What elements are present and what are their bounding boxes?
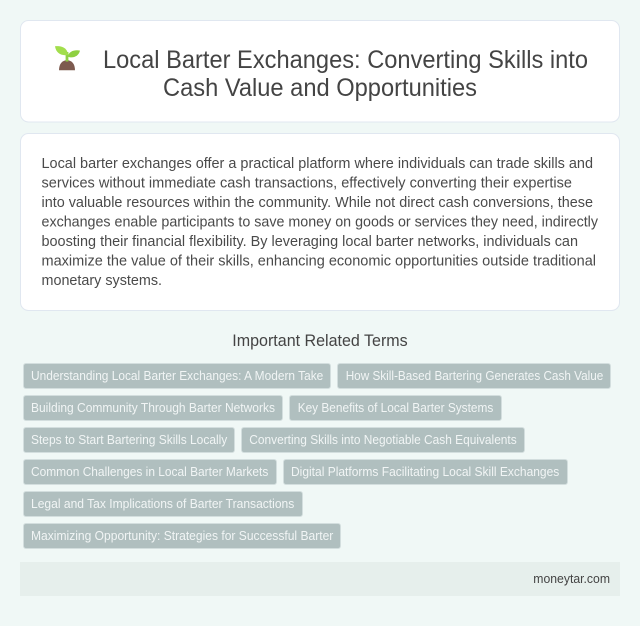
tag	[242, 428, 524, 452]
tag: Key Benefits of Local Barter Systems	[298, 401, 493, 415]
tag	[24, 396, 282, 420]
icon: seedling	[55, 46, 80, 70]
tag	[24, 428, 234, 452]
tag	[24, 460, 276, 484]
panel: title card	[20, 20, 620, 122]
title: Cash Value and Opportunities	[163, 75, 477, 102]
tag: How Skill-Based Bartering Generates Cash Value	[346, 369, 603, 383]
tag: Maximizing Opportunity: Strategies for Successful Barter	[31, 529, 333, 543]
tag	[338, 364, 610, 388]
text block: description: Local barter exchanges offer a practical platform where individuals can trade skills and	[42, 155, 593, 172]
title	[103, 47, 588, 102]
tag	[24, 524, 340, 548]
tag: Building Community Through Barter Networks	[31, 401, 275, 415]
tag: Converting Skills into Negotiable Cash Equivalents	[249, 433, 517, 447]
tag	[24, 492, 302, 516]
title: Local Barter Exchanges: Converting Skills into	[103, 47, 588, 74]
tag: Common Challenges in Local Barter Markets	[31, 465, 268, 479]
text block: description: maximize the value of their skills, enhancing economic opportunities outside traditional	[42, 252, 596, 270]
footer	[20, 562, 620, 596]
text block: description: services without immediate cash transactions, effectively converting their expertise	[42, 174, 572, 192]
tag	[24, 364, 330, 388]
text block: description: into valuable resources within the community. While not direct cash conversions, these	[42, 194, 593, 211]
tag: Legal and Tax Implications of Barter Transactions	[31, 497, 294, 511]
tag	[290, 396, 502, 420]
heading: important related terms: Important Related Terms	[232, 332, 408, 350]
tag: Steps to Start Bartering Skills Locally	[31, 433, 228, 447]
text block: description: monetary systems.	[42, 272, 162, 289]
panel: description card	[20, 134, 620, 310]
tag	[284, 460, 568, 484]
text block: description: boosting their financial flexibility. By leveraging local barter networks, individuals can	[42, 233, 578, 250]
tag list	[24, 364, 610, 548]
tag: Digital Platforms Facilitating Local Skill Exchanges	[291, 465, 559, 479]
text block: description: exchanges enable participants to save money on goods or services they need, indirectly	[42, 214, 598, 230]
tag: Understanding Local Barter Exchanges: A Modern Take	[31, 369, 323, 383]
footer source text: moneytar.com	[533, 572, 610, 586]
text block: description	[42, 155, 598, 289]
